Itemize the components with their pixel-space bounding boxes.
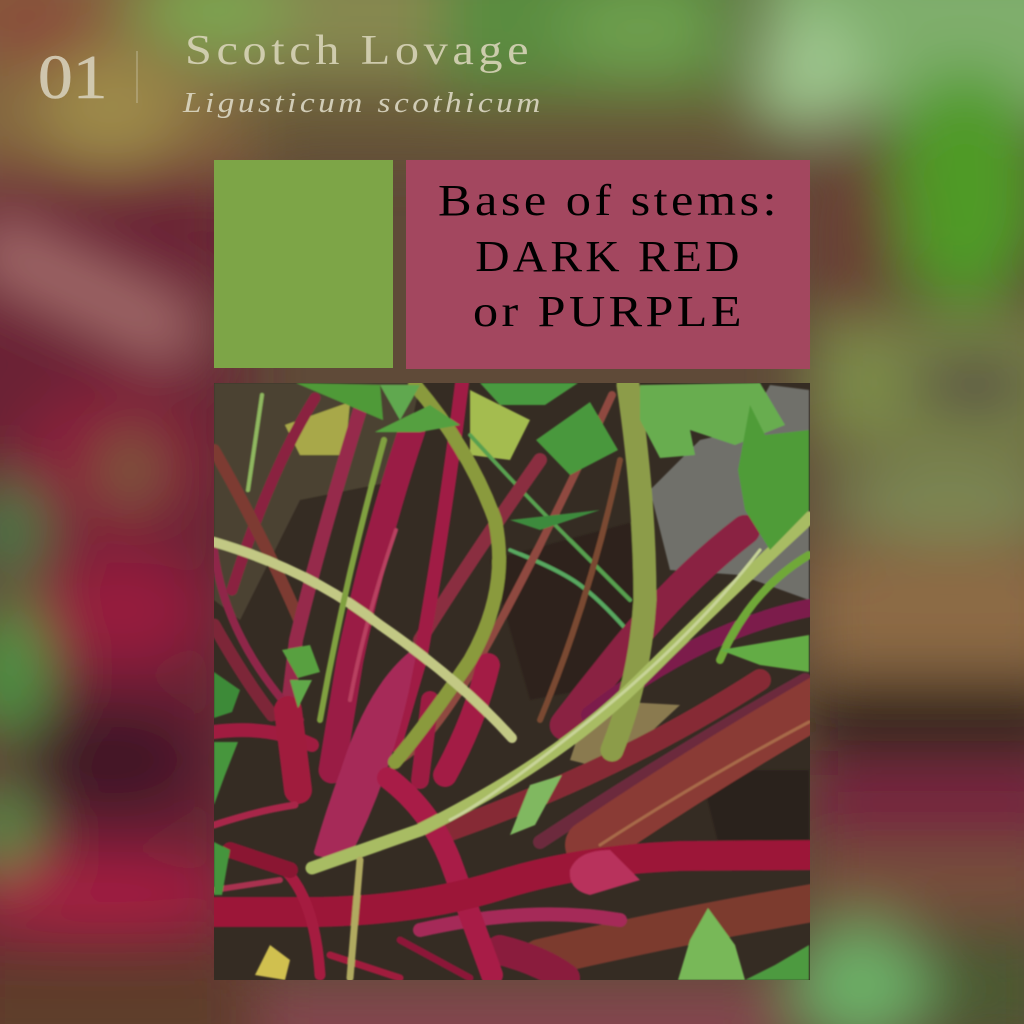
sheath and main crossing stems — [318, 655, 412, 858]
dark red stems, rear — [232, 398, 315, 590]
panel: stem colour description: or PURPLE — [473, 287, 745, 336]
thin green stems — [470, 435, 630, 600]
panel: stem colour description: DARK RED — [475, 232, 743, 281]
large stem — [332, 430, 412, 770]
green colour swatch — [214, 160, 393, 368]
subtitle: Ligusticum scothicum: Ligusticum scothicum — [183, 87, 544, 119]
panel: stem colour description — [406, 160, 810, 369]
title: Scotch Lovage: Scotch Lovage — [185, 28, 533, 74]
background leaves — [285, 402, 350, 455]
pale green stems — [395, 385, 499, 762]
soil patches — [214, 383, 420, 620]
divider — [136, 51, 138, 103]
leaves — [296, 383, 383, 420]
number 01: 01 — [38, 44, 107, 112]
photo: red stems of Scotch lovage — [214, 383, 810, 980]
panel: stem colour description: Base of stems: — [438, 176, 780, 225]
rock — [650, 385, 809, 600]
right stems — [565, 530, 745, 725]
